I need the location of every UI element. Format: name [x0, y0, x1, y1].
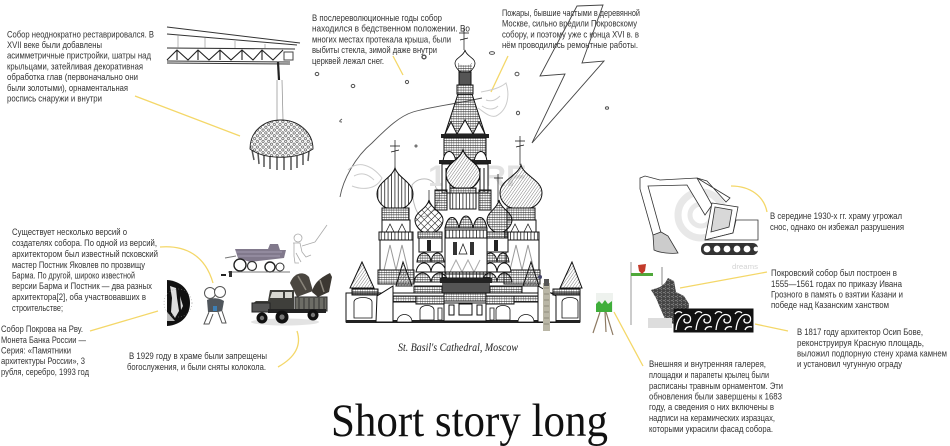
callout text: 1930s — [770, 211, 904, 233]
callout text: fires: Пожары, бывшие частыми в деревянной — [502, 8, 640, 19]
caption: St. Basil's Cathedral, Moscow — [398, 340, 518, 354]
connector: post-revolution years — [393, 56, 403, 75]
lower gallery base — [346, 286, 580, 323]
callout text: coin: Собор Покрова на Рву. — [1, 324, 83, 335]
callout text: post-revolution years: многих местах протекала крыша, были — [312, 34, 451, 45]
restorer on ladder — [538, 275, 550, 331]
callout text: post-revolution years: В послереволюционные годы собор — [312, 13, 442, 24]
icon: silver coin — [164, 280, 192, 326]
icon: easel with grass painting — [593, 293, 613, 335]
callout text: post-revolution years: выбиты стекла, зимой даже внутри — [312, 45, 437, 56]
central dome — [435, 150, 491, 210]
callout text: creators: создателях собора. По одной из версий, — [12, 238, 157, 249]
gallery tents — [350, 262, 582, 288]
connector: fires — [491, 56, 508, 92]
callout text: post-revolution years — [312, 13, 470, 67]
callout text: ornament: обновления были завершены к 1683 — [649, 392, 782, 402]
connector: railing — [755, 324, 788, 331]
left big onion tower — [377, 140, 414, 284]
callout text: creators: архитектора[2], оба участвовавших в — [12, 292, 146, 303]
central block — [440, 216, 492, 293]
callout text: creators: Барма. По другой, широко известной — [12, 270, 135, 282]
excavator watermark: dreams — [732, 264, 759, 271]
callout text: coin: Серия: «Памятники — [1, 346, 71, 356]
callout text: restorations: XVII веке были добавлены — [7, 40, 102, 51]
callout text: construction: Покровский собор был построен в — [771, 268, 897, 279]
callout text: restorations: асимметричные пристройки, шатры над — [7, 51, 151, 62]
callout text: construction: Грозного в память о взятии Казани и — [771, 290, 903, 300]
connector: easel — [614, 312, 643, 366]
right big onion tower — [500, 136, 542, 284]
title: Short story long — [331, 395, 608, 446]
callout text: restorations: крыльцами, затейливая декоративная — [7, 61, 143, 72]
connector: construction — [680, 272, 767, 288]
icon: construction crane holding a dome — [167, 27, 313, 170]
callout text: restorations: обработка глав (первоначально они — [7, 72, 138, 83]
icon: Kazan flag — [631, 262, 653, 325]
icon: snowflakes — [315, 52, 609, 147]
callout text: 1817: В 1817 году архитектор Осип Бове, — [797, 327, 923, 338]
callout text: creators: версии Барма и Постник — два разных — [12, 281, 152, 292]
icon: fire wagon — [221, 244, 290, 277]
callout text: coin — [1, 324, 89, 378]
callout text: restorations — [7, 30, 154, 104]
icon: Barma and Postnik figures — [204, 286, 226, 324]
callout text: restorations: были золотыми), орнаментальная — [7, 83, 128, 94]
callout text: creators: Существует несколько версий о — [12, 227, 127, 238]
callout text: 1929: В 1929 году в храме были запрещены — [129, 351, 267, 362]
callout text: 1930s: В середине 1930-х гг. храму угрожал — [770, 211, 902, 222]
callout text: ornament — [649, 359, 783, 435]
connector: 1930s — [731, 186, 767, 212]
callout text: construction: победе над Казанским ханством — [771, 300, 889, 311]
callout text: fires — [502, 8, 640, 51]
callout text: post-revolution years: находился в бедственном положении. Во — [312, 24, 470, 35]
callout text: creators — [12, 227, 158, 314]
callout text: 1929: богослужения, и были сняты колокола. — [127, 362, 266, 373]
icon: ornamental railing — [674, 309, 753, 332]
callout text: coin: Монета Банка России — — [1, 335, 86, 346]
central tent tower — [439, 28, 491, 193]
icon: excavator — [640, 176, 758, 255]
callout text: coin: архитектуры России», 3 — [1, 356, 85, 367]
small right onion — [482, 174, 512, 282]
connector: 1929 — [278, 331, 298, 367]
icon: Ivan the Terrible on horseback — [648, 267, 689, 328]
callout text: ornament: году, а сведения о них включены в — [649, 402, 774, 413]
callout text: fires: собору, и поэтому уже с конца XVI в. в — [502, 29, 639, 40]
connector: restorations — [135, 96, 240, 136]
icon: truck with bells — [251, 273, 332, 326]
callout text: 1817: и установил чугунную ограду — [797, 359, 902, 370]
callout text: restorations: роспись снаружи и внутри — [7, 94, 102, 104]
icon: flame arc over cathedral — [340, 83, 508, 217]
callout text: coin: рубля, серебро, 1993 год — [1, 367, 89, 378]
callout text: 1817: реконструируя Красную площадь, — [797, 338, 924, 349]
callout text: restorations: Собор неоднократно реставрировался. В — [7, 30, 154, 40]
watermark: 123RF — [428, 160, 526, 193]
callout text: ornament: расписаны травным орнаментом. Эти — [649, 381, 783, 392]
callout text: post-revolution years: церквей лежал снег. — [312, 56, 384, 67]
callout text: construction — [771, 268, 903, 311]
callout text: creators: строительстве; — [12, 303, 63, 314]
callout text: creators: архитектором был известный псковский — [12, 249, 158, 260]
callout text: fires: нём проводились ремонтные работы. — [502, 40, 638, 51]
callout text: ornament: надписи на керамических изразцах, — [649, 413, 775, 424]
callout text: ornament: площадки и парапеты крылец были — [649, 370, 769, 381]
callout text: 1817 — [797, 327, 947, 370]
connector: creators — [160, 247, 213, 283]
icon: lightning bolt — [532, 5, 604, 143]
icon: firefighter sketch — [293, 225, 327, 263]
connector: coin — [90, 311, 158, 331]
callout text: creators: мастер Постник Яковлев по прозвищу — [12, 260, 145, 271]
illustration: St. Basil's Cathedral — [346, 28, 582, 331]
callout text: ornament: Внешняя и внутренняя галерея, — [649, 359, 766, 370]
callout text: fires: Москве, сильно вредили Покровскому — [502, 19, 637, 30]
callout text: 1930s: снос, однако он избежал разрушения — [770, 222, 904, 233]
small left lattice onion — [414, 190, 448, 282]
callout text: construction: 1555—1561 годах по приказу Ивана — [771, 279, 903, 290]
callout text: ornament: которыми украсили фасад собора. — [649, 424, 773, 435]
callout text: 1929 — [127, 351, 267, 373]
